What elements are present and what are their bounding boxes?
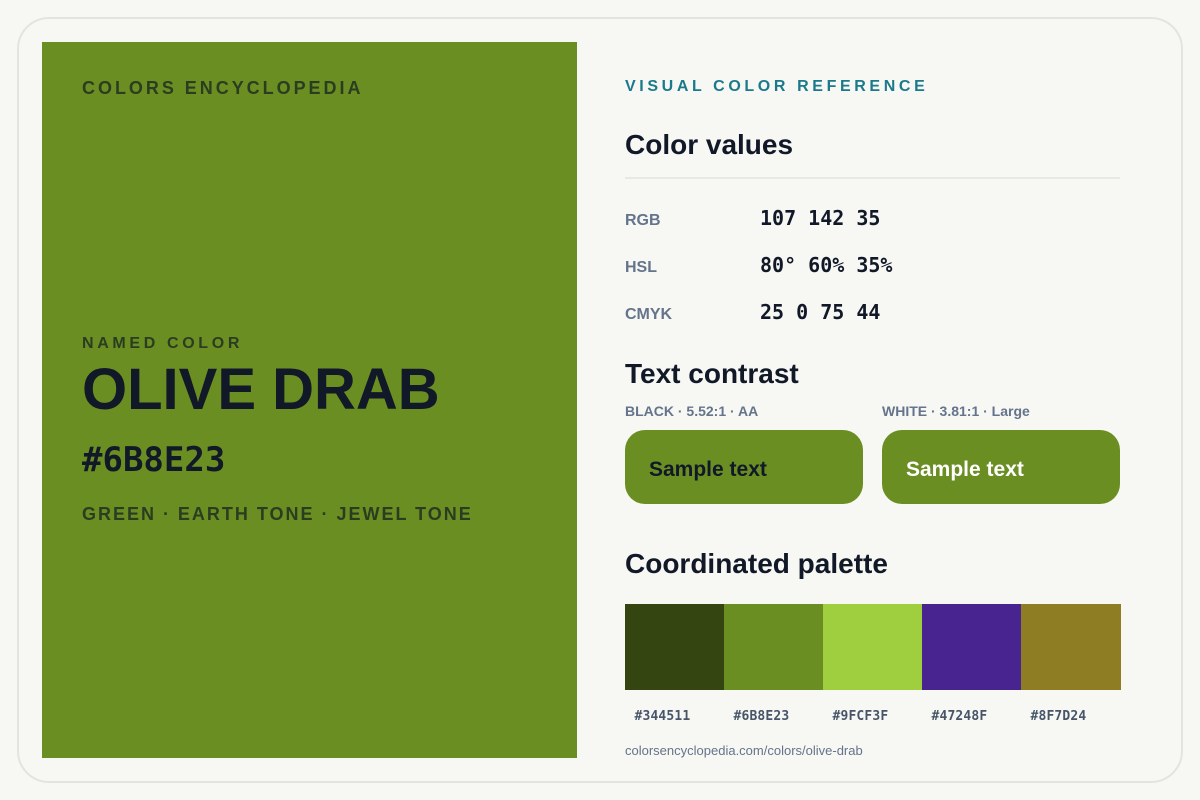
heading: coordinated palette: Coordinated palette bbox=[625, 548, 888, 579]
CMYK value: 25 0 75 44 bbox=[760, 300, 880, 324]
RGB label: RGB bbox=[625, 212, 661, 229]
contrast label: black: BLACK · 5.52:1 · AA bbox=[625, 403, 758, 419]
contrast label: white: WHITE · 3.81:1 · Large bbox=[882, 403, 1030, 419]
CMYK label: CMYK bbox=[625, 306, 672, 323]
RGB value: 107 142 35 bbox=[760, 206, 880, 230]
source url: colorsencyclopedia.com/colors/olive-drab bbox=[625, 743, 863, 758]
hex label 8F7D24: #8F7D24 bbox=[1030, 709, 1086, 724]
hex label 6B8E23: #6B8E23 bbox=[734, 709, 789, 724]
sample: white on olive bbox=[882, 430, 1120, 504]
swatch 6B8E23 bbox=[724, 604, 823, 690]
brand label: COLORS ENCYCLOPEDIA bbox=[82, 78, 363, 98]
HSL row bbox=[625, 253, 892, 277]
heading: color values: Color values bbox=[625, 129, 793, 160]
color name title: OLIVE DRAB bbox=[82, 357, 440, 422]
heading: text contrast: Text contrast bbox=[625, 358, 799, 389]
CMYK row bbox=[625, 300, 880, 324]
color tags: GREEN · EARTH TONE · JEWEL TONE bbox=[82, 504, 473, 524]
swatch 344511 bbox=[625, 604, 724, 690]
sample: black on olive bbox=[625, 430, 863, 504]
sample: black on olive: Sample text bbox=[649, 458, 767, 481]
sample: white on olive: Sample text bbox=[906, 458, 1024, 481]
eyebrow: visual color reference: VISUAL COLOR REFERENCE bbox=[625, 78, 928, 95]
hex label 47248F: #47248F bbox=[932, 709, 987, 724]
palette swatches bbox=[625, 604, 1121, 690]
panel: color swatch hero bbox=[42, 42, 577, 758]
hex label 344511: #344511 bbox=[634, 709, 690, 724]
swatch 8F7D24 bbox=[1021, 604, 1121, 690]
HSL value: 80° 60% 35% bbox=[760, 253, 892, 277]
divider bbox=[625, 177, 1120, 179]
RGB row bbox=[625, 206, 880, 230]
HSL label: HSL bbox=[625, 259, 657, 276]
swatch 9FCF3F bbox=[823, 604, 922, 690]
hex label 9FCF3F: #9FCF3F bbox=[832, 709, 888, 724]
swatch 47248F bbox=[922, 604, 1021, 690]
hex value: #6B8E23 bbox=[82, 440, 225, 480]
eyebrow: named color: NAMED COLOR bbox=[82, 335, 243, 352]
